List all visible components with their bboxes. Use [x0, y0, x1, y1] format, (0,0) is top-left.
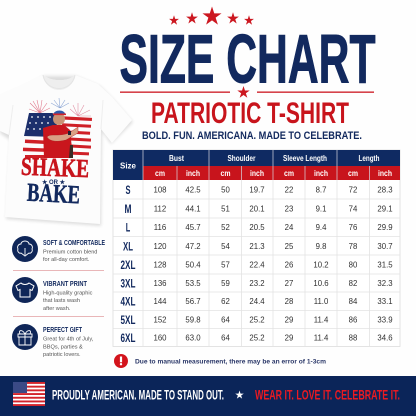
- row XL: XL: [123, 240, 133, 254]
- row 4XL: 24.4: [249, 297, 265, 306]
- table header: cm: [284, 169, 294, 178]
- feature: perfect gift: [12, 324, 94, 358]
- table header: inch: [250, 169, 264, 178]
- row S: 108: [153, 185, 167, 194]
- description: [43, 250, 97, 263]
- row 6XL: 64: [221, 333, 230, 342]
- row S: 22: [285, 185, 293, 194]
- note text: Due to manual measurement, there may be an error of 1-3cm: [135, 358, 326, 366]
- row 2XL: [120, 258, 393, 272]
- feature: soft and comfortable: [12, 236, 105, 263]
- description: High-quality graphic: [43, 290, 93, 296]
- row M: 29.1: [377, 204, 393, 213]
- row 5XL: 11.4: [314, 315, 329, 324]
- row 5XL: 59.8: [185, 315, 201, 324]
- row L: 76: [349, 223, 357, 232]
- footer star: [235, 390, 244, 399]
- row L: [126, 220, 393, 234]
- description: after wash.: [43, 306, 71, 312]
- row XL: [123, 240, 393, 254]
- footer left text: PROUDLY AMERICAN. MADE TO STAND OUT.: [52, 388, 224, 402]
- row S: 19.7: [249, 185, 265, 194]
- row M: [124, 202, 393, 216]
- row 6XL: 6XL: [120, 331, 136, 345]
- row S: S: [126, 183, 130, 197]
- row 4XL: 4XL: [120, 294, 136, 308]
- shirt graphic: fireworks: [29, 98, 91, 116]
- icon: cotton: [12, 236, 38, 262]
- t-shirt product image: [0, 75, 133, 226]
- row 4XL: 62: [221, 297, 230, 306]
- heading: SOFT & COMFORTABLE: [43, 238, 105, 247]
- row S: 8.7: [316, 185, 326, 194]
- row 5XL: [120, 313, 393, 327]
- row 2XL: 2XL: [120, 258, 136, 272]
- row 4XL: 144: [153, 297, 167, 306]
- row 2XL: 31.5: [377, 260, 393, 270]
- heading: PERFECT GIFT: [43, 325, 82, 334]
- shirt graphic: OR: ★ OR ★: [42, 179, 66, 186]
- table header: Size: [120, 160, 136, 170]
- row 3XL: 32.3: [377, 279, 393, 288]
- row 6XL: 160: [153, 333, 167, 342]
- row 5XL: 152: [153, 315, 167, 324]
- row 5XL: 29: [285, 315, 293, 324]
- row M: 9.1: [316, 204, 326, 213]
- row M: 44.1: [185, 204, 201, 213]
- row M: 51: [221, 204, 230, 213]
- table header: Sleeve Length: [283, 153, 327, 163]
- table body: [113, 150, 400, 346]
- row M: 74: [349, 204, 358, 213]
- row S: [126, 183, 393, 197]
- row 6XL: [120, 331, 393, 345]
- row S: 42.5: [185, 185, 201, 194]
- row 6XL: 11.4: [314, 333, 329, 342]
- row 6XL: 88: [349, 333, 357, 342]
- row S: 28.3: [377, 185, 393, 194]
- row M: 23: [285, 204, 293, 213]
- row 2XL: 50.4: [185, 260, 201, 270]
- row XL: 78: [349, 242, 357, 251]
- shirt graphic: BAKE: BAKE: [26, 178, 81, 209]
- row 4XL: [120, 294, 393, 308]
- row 2XL: 57: [221, 260, 230, 270]
- icon: warning: [114, 354, 128, 368]
- row 4XL: 84: [349, 297, 358, 306]
- row 2XL: 80: [349, 260, 358, 270]
- table header: [113, 150, 400, 180]
- row S: 72: [349, 185, 357, 194]
- row 6XL: 25.2: [249, 333, 265, 342]
- icon: american flag: [13, 382, 45, 406]
- row L: 20.5: [249, 223, 265, 232]
- row XL: 54: [221, 242, 230, 251]
- row M: M: [124, 202, 132, 216]
- row 6XL: 29: [285, 333, 293, 342]
- row XL: 9.8: [316, 242, 326, 251]
- description: Great for 4th of July,: [43, 336, 94, 342]
- row 4XL: 28: [285, 297, 293, 306]
- row 3XL: 3XL: [120, 276, 136, 290]
- icon: gift: [12, 324, 38, 350]
- table header: inch: [378, 169, 392, 178]
- footer banner: [0, 376, 416, 416]
- row XL: 21.3: [249, 242, 265, 251]
- row 3XL: 53.5: [185, 279, 201, 288]
- row L: 45.7: [185, 223, 201, 232]
- row L: 116: [154, 223, 166, 232]
- table header: cm: [155, 169, 165, 178]
- description: [43, 336, 94, 358]
- row XL: 120: [153, 242, 167, 251]
- table header: Length: [358, 153, 380, 163]
- row XL: 30.7: [377, 242, 393, 251]
- row 3XL: 27: [285, 279, 293, 288]
- row 3XL: 59: [221, 279, 230, 288]
- tagline: BOLD. FUN. AMERICANA. MADE TO CELEBRATE.: [142, 130, 362, 142]
- title divider with star: [120, 86, 374, 98]
- row L: L: [126, 220, 130, 234]
- row XL: 47.2: [185, 242, 201, 251]
- description: for all-day comfort.: [43, 257, 90, 263]
- row 3XL: [120, 276, 393, 290]
- row 5XL: 64: [221, 315, 230, 324]
- measurement note: [114, 354, 326, 368]
- stars row: [169, 6, 254, 25]
- feature: vibrant print: [12, 277, 93, 312]
- description: [43, 290, 93, 312]
- icon: t-shirt: [12, 277, 38, 303]
- shirt graphic: SHAKE: SHAKE: [21, 152, 90, 183]
- row 5XL: 86: [349, 315, 357, 324]
- size table: [113, 150, 400, 346]
- row 3XL: 136: [153, 279, 167, 288]
- row 6XL: 63.0: [185, 333, 201, 342]
- row L: 29.9: [377, 223, 393, 232]
- row M: 112: [154, 204, 166, 213]
- row 5XL: 33.9: [377, 315, 393, 324]
- row 4XL: 33.1: [377, 297, 393, 306]
- row 2XL: 10.2: [313, 260, 329, 270]
- row 3XL: 82: [349, 279, 357, 288]
- table header: cm: [220, 169, 230, 178]
- description: patriotic lovers.: [43, 352, 81, 358]
- row 6XL: 34.6: [377, 333, 393, 342]
- row 2XL: 26: [285, 260, 293, 270]
- description: Premium cotton blend: [43, 250, 97, 256]
- table header: cm: [348, 169, 358, 178]
- row S: 50: [221, 185, 230, 194]
- row 5XL: 5XL: [120, 313, 136, 327]
- row 2XL: 128: [153, 260, 167, 270]
- description: BBQs, parties &: [43, 344, 83, 350]
- description: that lasts wash: [43, 298, 80, 304]
- row 5XL: 25.2: [249, 315, 265, 324]
- row 3XL: 23.2: [249, 279, 265, 288]
- table header: inch: [186, 169, 200, 178]
- table header: inch: [314, 169, 328, 178]
- row 2XL: 22.4: [249, 260, 265, 270]
- heading: VIBRANT PRINT: [43, 279, 87, 288]
- row M: 20.1: [249, 204, 265, 213]
- row 4XL: 11.0: [314, 297, 329, 306]
- table header: Bust: [169, 153, 184, 163]
- row XL: 25: [285, 242, 294, 251]
- row 4XL: 56.7: [185, 297, 201, 306]
- shirt graphic: man: [43, 110, 78, 158]
- shirt graphic: flag: [23, 113, 92, 158]
- row L: 9.4: [316, 223, 327, 232]
- row L: 24: [285, 223, 294, 232]
- table header: Shoulder: [228, 153, 256, 163]
- row 3XL: 10.6: [313, 279, 329, 288]
- row L: 52: [221, 223, 230, 232]
